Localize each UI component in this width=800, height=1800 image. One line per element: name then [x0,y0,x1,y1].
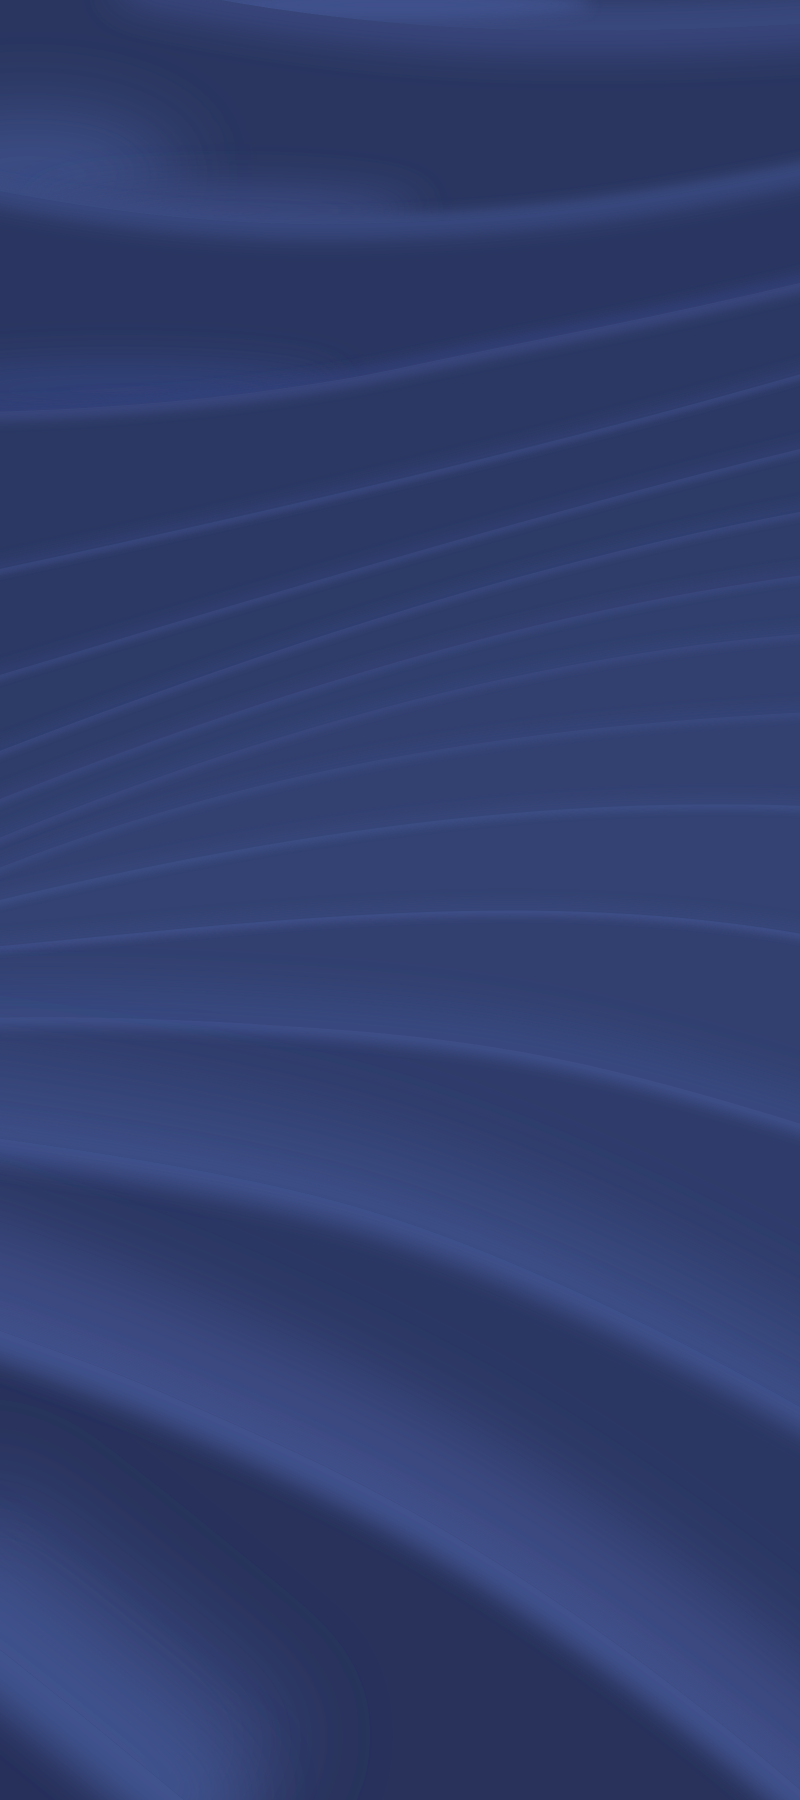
fold 12 [0,988,800,1134]
fold 1: top sweep [116,0,800,64]
fold 4 [0,368,800,576]
fold 2: upper highlight with wide left glow [0,86,800,246]
fold 7 [0,576,800,806]
fold 10 [0,804,800,906]
fold 5 [0,446,800,682]
fold 11 [0,910,800,952]
fold 9 [0,712,800,874]
fold 6 [0,510,800,758]
fold 13 [0,1054,800,1462]
fold 15: bottom-left sweep [0,1464,314,1800]
fold 14 [0,1202,800,1800]
fold 8 [0,634,800,844]
fold 3 [0,272,800,425]
